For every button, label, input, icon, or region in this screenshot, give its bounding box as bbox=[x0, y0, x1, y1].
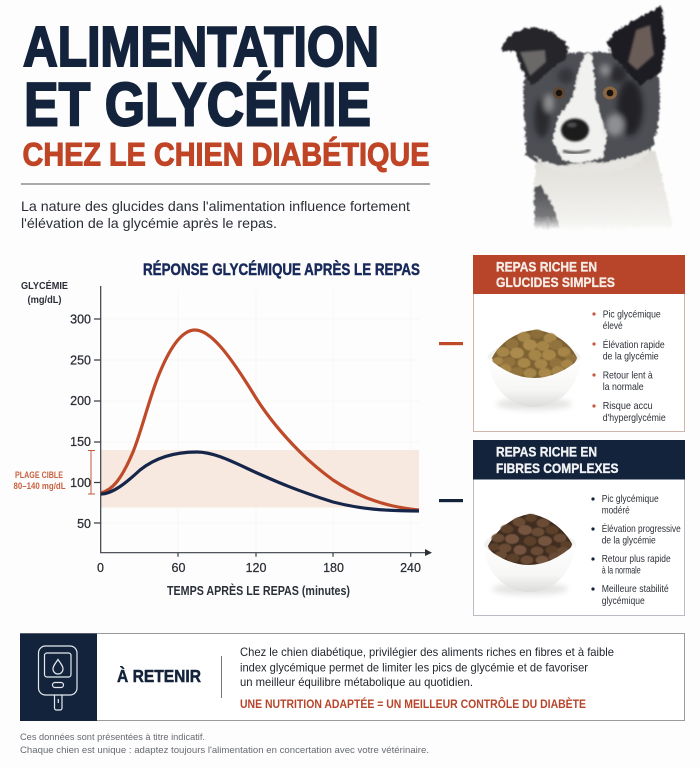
bullet list: à la normale bbox=[602, 564, 641, 576]
axis arrow bbox=[425, 549, 432, 556]
x axis labels: 240 bbox=[400, 561, 421, 575]
y axis labels: 250 bbox=[70, 354, 91, 368]
panel header bbox=[473, 255, 685, 294]
target range label: 80–140 mg/dL bbox=[14, 481, 66, 492]
intro text: l'élévation de la glycémie après le repas. bbox=[21, 215, 277, 231]
bullet list: d'hyperglycémie bbox=[603, 412, 666, 424]
y axis labels: 150 bbox=[70, 435, 91, 449]
line chart: glycemic response bbox=[14, 279, 432, 598]
icon: glucose meter bbox=[20, 634, 97, 721]
footnote: Ces données sont présentées à titre indicatif. bbox=[20, 732, 205, 743]
x axis labels: 120 bbox=[246, 561, 266, 575]
target range label bbox=[14, 470, 66, 492]
chart heading: RÉPONSE GLYCÉMIQUE APRÈS LE REPAS bbox=[143, 260, 420, 279]
y axis labels: 100 bbox=[70, 476, 91, 490]
legend dash: simple carbohydrates bbox=[439, 342, 463, 345]
bullet list bbox=[591, 493, 681, 607]
title: ET GLYCÉMIE bbox=[24, 70, 371, 140]
title: ALIMENTATION bbox=[23, 15, 379, 79]
x axis title: TEMPS APRÈS LE REPAS (minutes) bbox=[167, 583, 350, 598]
title: CHEZ LE CHIEN DIABÉTIQUE bbox=[22, 136, 430, 172]
target range label: PLAGE CIBLE bbox=[15, 470, 63, 481]
bullet list: Risque accu bbox=[603, 400, 653, 412]
panel: simple carbohydrates bbox=[473, 255, 685, 432]
bullet list: Pic glycémique bbox=[602, 493, 659, 505]
bullet list: la normale bbox=[603, 381, 644, 393]
panel heading: REPAS RICHE EN bbox=[496, 444, 597, 460]
y axis title: (mg/dL) bbox=[28, 294, 62, 306]
bullet list: de la glycémie bbox=[602, 534, 656, 546]
panel: key takeaway bbox=[20, 634, 684, 721]
legend dash: complex fibres bbox=[439, 499, 463, 502]
bullet list: Retour plus rapide bbox=[602, 553, 671, 565]
bullet list bbox=[592, 308, 666, 424]
panel heading bbox=[496, 444, 618, 476]
footnote bbox=[20, 732, 429, 756]
illustration: dog portrait bbox=[501, 5, 673, 230]
panel heading bbox=[496, 258, 615, 290]
bullet list: Retour lent à bbox=[603, 370, 653, 382]
x axis labels: 180 bbox=[323, 561, 344, 575]
panel heading: REPAS RICHE EN bbox=[496, 258, 597, 274]
takeaway text: un meilleur équilibre métabolique au quotidien. bbox=[240, 675, 473, 689]
x axis labels: 60 bbox=[172, 561, 185, 575]
title bbox=[22, 15, 430, 172]
y axis labels: 50 bbox=[77, 517, 91, 531]
bullet list: élevé bbox=[603, 320, 623, 332]
bullet list: Élévation rapide bbox=[603, 338, 665, 351]
takeaway text: index glycémique permet de limiter les pics de glycémie et de favoriser bbox=[240, 660, 588, 674]
intro text: La nature des glucides dans l'alimentation influence fortement bbox=[21, 198, 410, 214]
y axis labels bbox=[70, 312, 91, 531]
takeaway heading: À RETENIR bbox=[117, 665, 201, 686]
y axis title: GLYCÉMIE bbox=[21, 279, 68, 292]
target range bracket bbox=[88, 450, 95, 494]
curve: simple carbohydrates bbox=[101, 330, 419, 510]
y axis labels: 300 bbox=[70, 312, 91, 326]
icon: bowl of dark kibble bbox=[484, 514, 576, 595]
axes bbox=[94, 286, 428, 557]
panel heading: GLUCIDES SIMPLES bbox=[496, 274, 615, 290]
bullet list: modéré bbox=[602, 504, 630, 516]
takeaway text bbox=[240, 645, 614, 689]
panel heading: FIBRES COMPLEXES bbox=[496, 460, 618, 476]
curve: complex fibres bbox=[101, 452, 419, 511]
y axis title bbox=[21, 279, 68, 306]
target range band bbox=[101, 450, 419, 508]
panel header bbox=[473, 440, 685, 480]
icon: bowl of light kibble bbox=[488, 330, 581, 410]
bullet list: Meilleure stabilité bbox=[602, 583, 669, 595]
panel: complex fibres bbox=[473, 440, 685, 616]
x axis labels bbox=[97, 561, 421, 575]
bullet list: de la glycémie bbox=[603, 350, 659, 362]
bullet list: glycémique bbox=[602, 595, 645, 607]
bullet list: Pic glycémique bbox=[603, 308, 661, 320]
footnote: Chaque chien est unique : adaptez toujours l'alimentation en concertation avec votre vétérinaire. bbox=[20, 745, 429, 756]
bullet list: Élévation progressive bbox=[602, 522, 681, 535]
intro text bbox=[21, 198, 410, 231]
y axis labels: 200 bbox=[70, 394, 91, 408]
x axis labels: 0 bbox=[97, 561, 104, 575]
takeaway text: Chez le chien diabétique, privilégier des aliments riches en fibres et à faible bbox=[240, 645, 614, 659]
takeaway highlight: UNE NUTRITION ADAPTÉE = UN MEILLEUR CONTRÔLE DU DIABÈTE bbox=[240, 696, 586, 711]
